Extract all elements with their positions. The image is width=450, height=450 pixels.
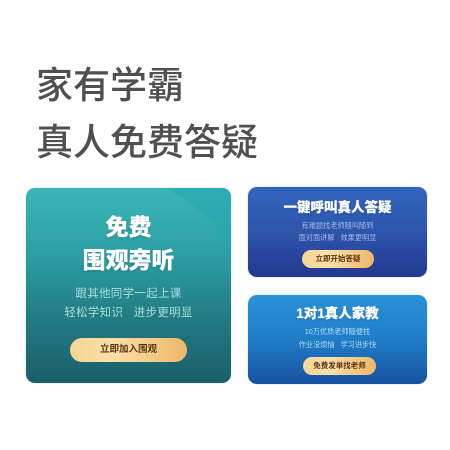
button: join: 立即加入围观 (100, 344, 157, 355)
description line 2: 面对面讲解 效果更明显 (299, 233, 376, 242)
panel: one-tap live answers (248, 187, 427, 277)
panel heading: 1对1真人家教 (296, 306, 379, 321)
decorative corner sweep (166, 188, 231, 230)
description line 1: 跟其他同学一起上课 (75, 288, 182, 300)
button: find tutor (303, 357, 376, 375)
description line 1: 10万优质老师随便找 (305, 327, 370, 336)
panel heading line 1: 免费 (106, 214, 152, 240)
button: start: 立即开始答疑 (316, 254, 360, 263)
description line 1: 有难题找老师随叫随到 (302, 221, 373, 230)
panel: one-on-one tutor (248, 295, 427, 384)
title: main heading (36, 65, 258, 163)
button: join (70, 338, 187, 362)
panel: free sit-in class (26, 188, 231, 383)
heading line 2: 真人免费答疑 (36, 122, 258, 163)
panel heading: 一键呼叫真人答疑 (284, 200, 392, 215)
description line 2: 作业没烦恼 学习进步快 (299, 340, 376, 349)
heading line 1: 家有学霸 (36, 65, 184, 106)
button: find tutor: 免费发单找老师 (313, 361, 366, 370)
description line 2: 轻松学知识 进步更明显 (64, 307, 193, 319)
panel heading line 2: 围观旁听 (82, 247, 174, 273)
button: start (302, 250, 374, 268)
